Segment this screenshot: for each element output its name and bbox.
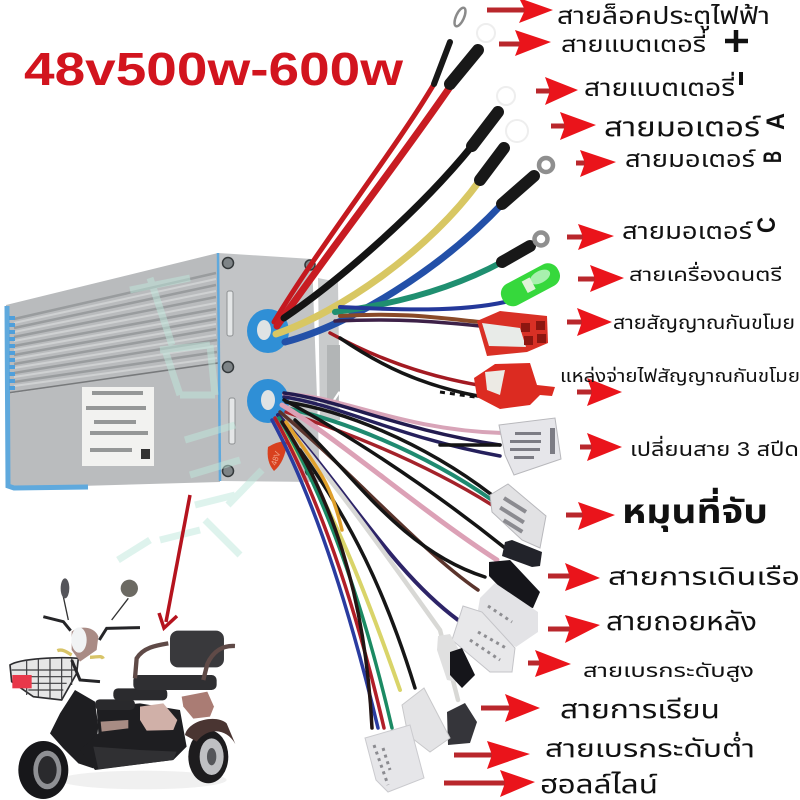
wire: blue to LED xyxy=(340,302,505,309)
arrow: box to tricycle xyxy=(159,495,190,628)
ground shadow xyxy=(60,771,227,789)
wire: yellow motor A xyxy=(276,120,528,334)
connector: small black learning plug pair xyxy=(437,634,477,745)
label: three-speed: เปลี่ยนสาย 3 สปีด xyxy=(630,435,799,461)
wires: throttle bundle xyxy=(286,402,492,505)
connector: white low brake xyxy=(402,688,450,752)
tricycle illustration xyxy=(10,578,235,799)
connector: red anti-theft signal xyxy=(477,311,548,356)
label: battery minus: สายแบตเตอรี่ xyxy=(584,71,735,102)
basket xyxy=(10,658,78,700)
label: motor A xyxy=(604,112,790,142)
label: motor A: A xyxy=(762,113,790,130)
label: motor C: สายมอเตอร์ xyxy=(622,218,753,244)
wire: pink and navy to speed switch xyxy=(284,393,502,456)
arrow 5 xyxy=(576,150,616,177)
headlight xyxy=(57,627,103,662)
label: motor B xyxy=(625,146,787,172)
arrow 3 xyxy=(536,77,578,105)
wire: white and grey to learning plug xyxy=(290,430,458,700)
green watermark strokes xyxy=(118,278,262,560)
wires: pink and black to cruise plug xyxy=(282,400,505,560)
floorboard xyxy=(93,747,177,769)
grommet lower xyxy=(247,379,289,423)
pink rear panel xyxy=(182,692,214,719)
label: throttle: หมุนที่จับ xyxy=(622,487,768,532)
arrow 7 xyxy=(578,265,624,292)
rear seat xyxy=(133,675,217,690)
arrow 13 xyxy=(548,615,600,643)
label: battery plus xyxy=(561,29,748,57)
blue end edge xyxy=(7,306,88,488)
stray white numeral: 4 xyxy=(331,387,345,414)
front wheel xyxy=(18,741,68,799)
controller box xyxy=(6,253,345,488)
label: motor A: สายมอเตอร์ xyxy=(604,112,762,142)
label: ignition lock: สายล็อคประตูไฟฟ้า xyxy=(557,2,770,31)
arrow 1 xyxy=(487,0,553,23)
connector pin marks xyxy=(470,606,512,660)
arrow 6 xyxy=(567,224,614,250)
front seat xyxy=(95,699,135,710)
callout arrows xyxy=(444,0,624,797)
wire: black and yellow to low brake plug xyxy=(283,430,415,690)
label: motor B: สายมอเตอร์ xyxy=(625,146,756,172)
arrow 14 xyxy=(528,650,571,677)
arrow 11 xyxy=(566,502,615,530)
dashed wire overprint xyxy=(440,392,475,397)
wire: green motor C xyxy=(335,232,548,312)
label: motor C: C xyxy=(753,217,781,233)
48V red badge: 48V xyxy=(269,450,283,467)
label: battery plus: สายแบตเตอรี่ xyxy=(561,29,706,57)
connector: black cruise upper xyxy=(502,540,542,567)
arrow 15 xyxy=(481,694,540,722)
wire: red ignition lock xyxy=(274,6,468,322)
end plate xyxy=(218,253,320,482)
arrow 4 xyxy=(551,112,596,140)
armrests xyxy=(135,643,235,680)
connector: red anti-theft power xyxy=(474,363,555,409)
label: anti-theft signal: สายสัญญาณกันขโมย xyxy=(613,313,795,334)
upper wire bundle xyxy=(274,6,553,396)
callout labels xyxy=(540,2,800,799)
arrow 2 xyxy=(499,30,551,56)
arrow 16 xyxy=(454,741,530,769)
rear fender xyxy=(185,719,235,744)
connector: green LED xyxy=(497,259,564,310)
title: 48v500w-600w xyxy=(24,43,403,95)
mirrors xyxy=(61,578,138,620)
rear wheel xyxy=(188,730,228,783)
finned top face xyxy=(6,253,220,394)
label: hall line: ฮอลล์ไลน์ xyxy=(540,769,658,799)
connector: white high brake xyxy=(452,606,515,672)
arrow 10 xyxy=(580,433,622,461)
rear bracket xyxy=(318,278,340,420)
connector: black cruise lower xyxy=(489,560,540,608)
connector: white throttle xyxy=(490,484,546,548)
label: motor B: B xyxy=(759,151,787,163)
wires: hall line bundle xyxy=(272,418,392,728)
pink side panel xyxy=(140,703,177,731)
connector: white hall xyxy=(365,725,424,792)
lower wire bundle xyxy=(272,393,505,728)
lower front face xyxy=(7,365,220,488)
label: reverse: สายถอยหลัง xyxy=(606,606,757,636)
arrow 12 xyxy=(548,563,600,591)
arrow 9 xyxy=(577,378,622,406)
body frame xyxy=(50,690,187,770)
connector: white reverse xyxy=(476,583,538,647)
rating label on box xyxy=(82,387,154,466)
grommet upper xyxy=(247,309,289,353)
label: anti-theft power: แหล่งจ่ายไฟสัญญาณกันขโมย xyxy=(560,366,800,386)
rear lower cushion xyxy=(113,688,167,700)
label: low brake: สายเบรกระดับต่ำ xyxy=(545,731,755,763)
wires: high brake plug xyxy=(278,415,458,620)
wire: red battery plus xyxy=(277,24,495,326)
wire: dark blue motor B xyxy=(285,158,553,342)
backrest xyxy=(170,631,224,667)
plate slots xyxy=(227,291,235,444)
frame gaps xyxy=(101,720,128,732)
wires: reverse plug xyxy=(280,412,485,590)
handlebars xyxy=(43,617,140,682)
48V red badge xyxy=(268,442,287,471)
wire: black battery minus xyxy=(284,87,515,318)
arrow 17 xyxy=(444,770,535,797)
connector: white three-speed xyxy=(499,418,561,475)
label: high brake: สายเบรกระดับสูง xyxy=(583,661,754,683)
label: learning: สายการเรียน xyxy=(560,694,720,724)
label: motor C xyxy=(622,217,781,244)
screws xyxy=(222,258,315,476)
arrow 8 xyxy=(567,308,612,336)
label: instrument: สายเครื่องดนตรี xyxy=(629,261,782,286)
wires: brown and purple to red connector xyxy=(330,315,480,396)
label: cruise: สายการเดินเรือ xyxy=(608,563,800,591)
